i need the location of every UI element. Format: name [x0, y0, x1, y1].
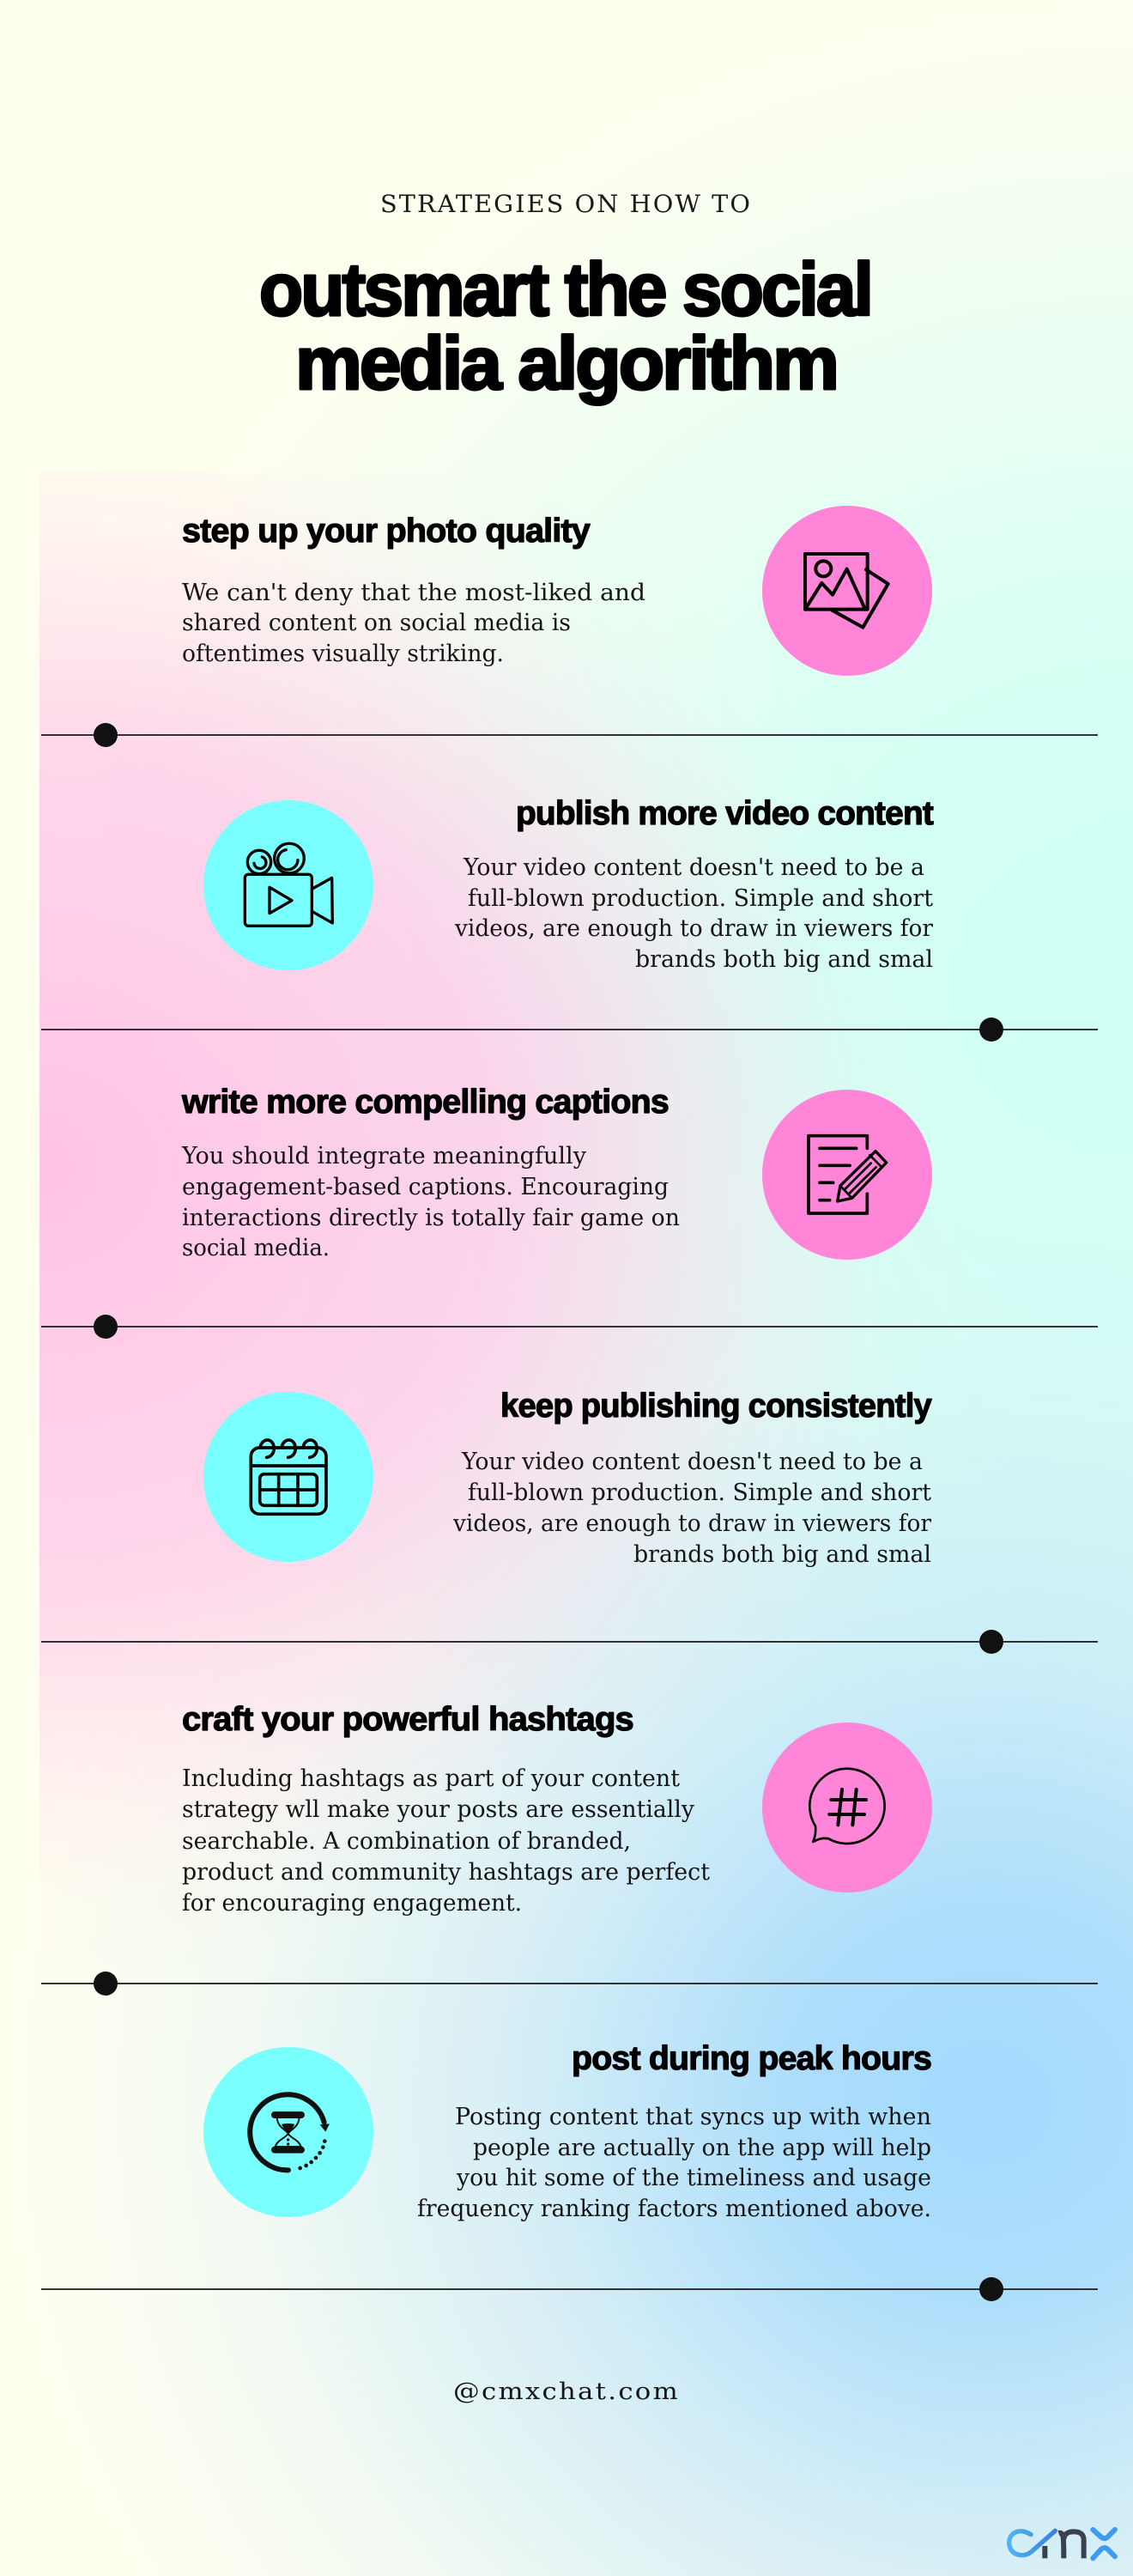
body text: people are actually on the app will help: [473, 2135, 931, 2161]
body text: videos, are enough to draw in viewers for: [454, 915, 933, 942]
body text: [181, 1143, 680, 1261]
body text: shared content on social media is: [182, 610, 571, 636]
divider with marker: [41, 1630, 1098, 1654]
body text: strategy wll make your posts are essentially: [182, 1796, 695, 1823]
body text: Including hashtags as part of your content: [182, 1765, 680, 1792]
divider with marker: [41, 1315, 1098, 1339]
panel: keep publishing consistently: [41, 1388, 1098, 1654]
subtitle: STRATEGIES ON HOW TO: [380, 190, 752, 218]
icon: photos: [762, 506, 932, 676]
logo: cmx: [1009, 2530, 1115, 2558]
body text: You should integrate meaningfully: [181, 1143, 587, 1170]
body text: interactions directly is totally fair game on: [182, 1205, 680, 1231]
body text: Your video content doesn't need to be a: [461, 1449, 923, 1475]
body text: [182, 1765, 710, 1917]
body text: you hit some of the timeliness and usage: [456, 2165, 931, 2191]
divider with marker: [41, 1971, 1098, 1996]
icon: hourglass with circular arrow: [203, 2047, 373, 2217]
body text: [182, 580, 645, 667]
panel: publish more video content: [41, 795, 1098, 1042]
body text: Posting content that syncs up with when: [455, 2104, 931, 2130]
heading: keep publishing consistently: [500, 1388, 932, 1425]
panel: step up your photo quality: [41, 506, 1098, 747]
icon: document and pencil: [762, 1090, 932, 1260]
body text: Your video content doesn't need to be a: [463, 854, 924, 881]
divider with marker: [41, 723, 1098, 747]
body text: [454, 854, 933, 973]
body text: full-blown production. Simple and short: [468, 1479, 931, 1506]
body text: brands both big and smal: [635, 946, 933, 973]
heading: write more compelling captions: [181, 1084, 669, 1121]
body text: oftentimes visually striking.: [182, 641, 504, 667]
footer handle: @cmxchat.com: [453, 2379, 680, 2405]
title: outsmart the social: [259, 248, 871, 331]
icon: hashtag speech bubble: [762, 1722, 932, 1893]
title: media algorithm: [295, 322, 837, 405]
heading: post during peak hours: [572, 2040, 931, 2077]
panel: write more compelling captions: [41, 1084, 1098, 1339]
body text: engagement-based captions. Encouraging: [182, 1174, 669, 1200]
panel: craft your powerful hashtags: [41, 1701, 1098, 1996]
body text: searchable. A combination of branded,: [182, 1828, 631, 1855]
body text: [417, 2104, 931, 2222]
body text: [452, 1449, 931, 1568]
icon: video camera: [203, 800, 373, 970]
body text: social media.: [182, 1235, 330, 1261]
body text: We can't deny that the most-liked and: [182, 580, 645, 606]
icon: calendar: [203, 1392, 373, 1562]
divider with marker: [41, 2277, 1098, 2301]
heading: step up your photo quality: [182, 513, 591, 550]
body text: product and community hashtags are perfect: [182, 1859, 710, 1886]
body text: frequency ranking factors mentioned above.: [417, 2196, 931, 2222]
panel: post during peak hours: [41, 2040, 1098, 2301]
body text: videos, are enough to draw in viewers for: [452, 1510, 931, 1537]
divider with marker: [41, 1018, 1098, 1042]
body text: for encouraging engagement.: [182, 1890, 522, 1917]
body text: brands both big and smal: [633, 1541, 931, 1568]
heading: craft your powerful hashtags: [182, 1701, 633, 1738]
heading: publish more video content: [516, 795, 934, 832]
body text: full-blown production. Simple and short: [468, 885, 933, 912]
title: [259, 248, 871, 405]
